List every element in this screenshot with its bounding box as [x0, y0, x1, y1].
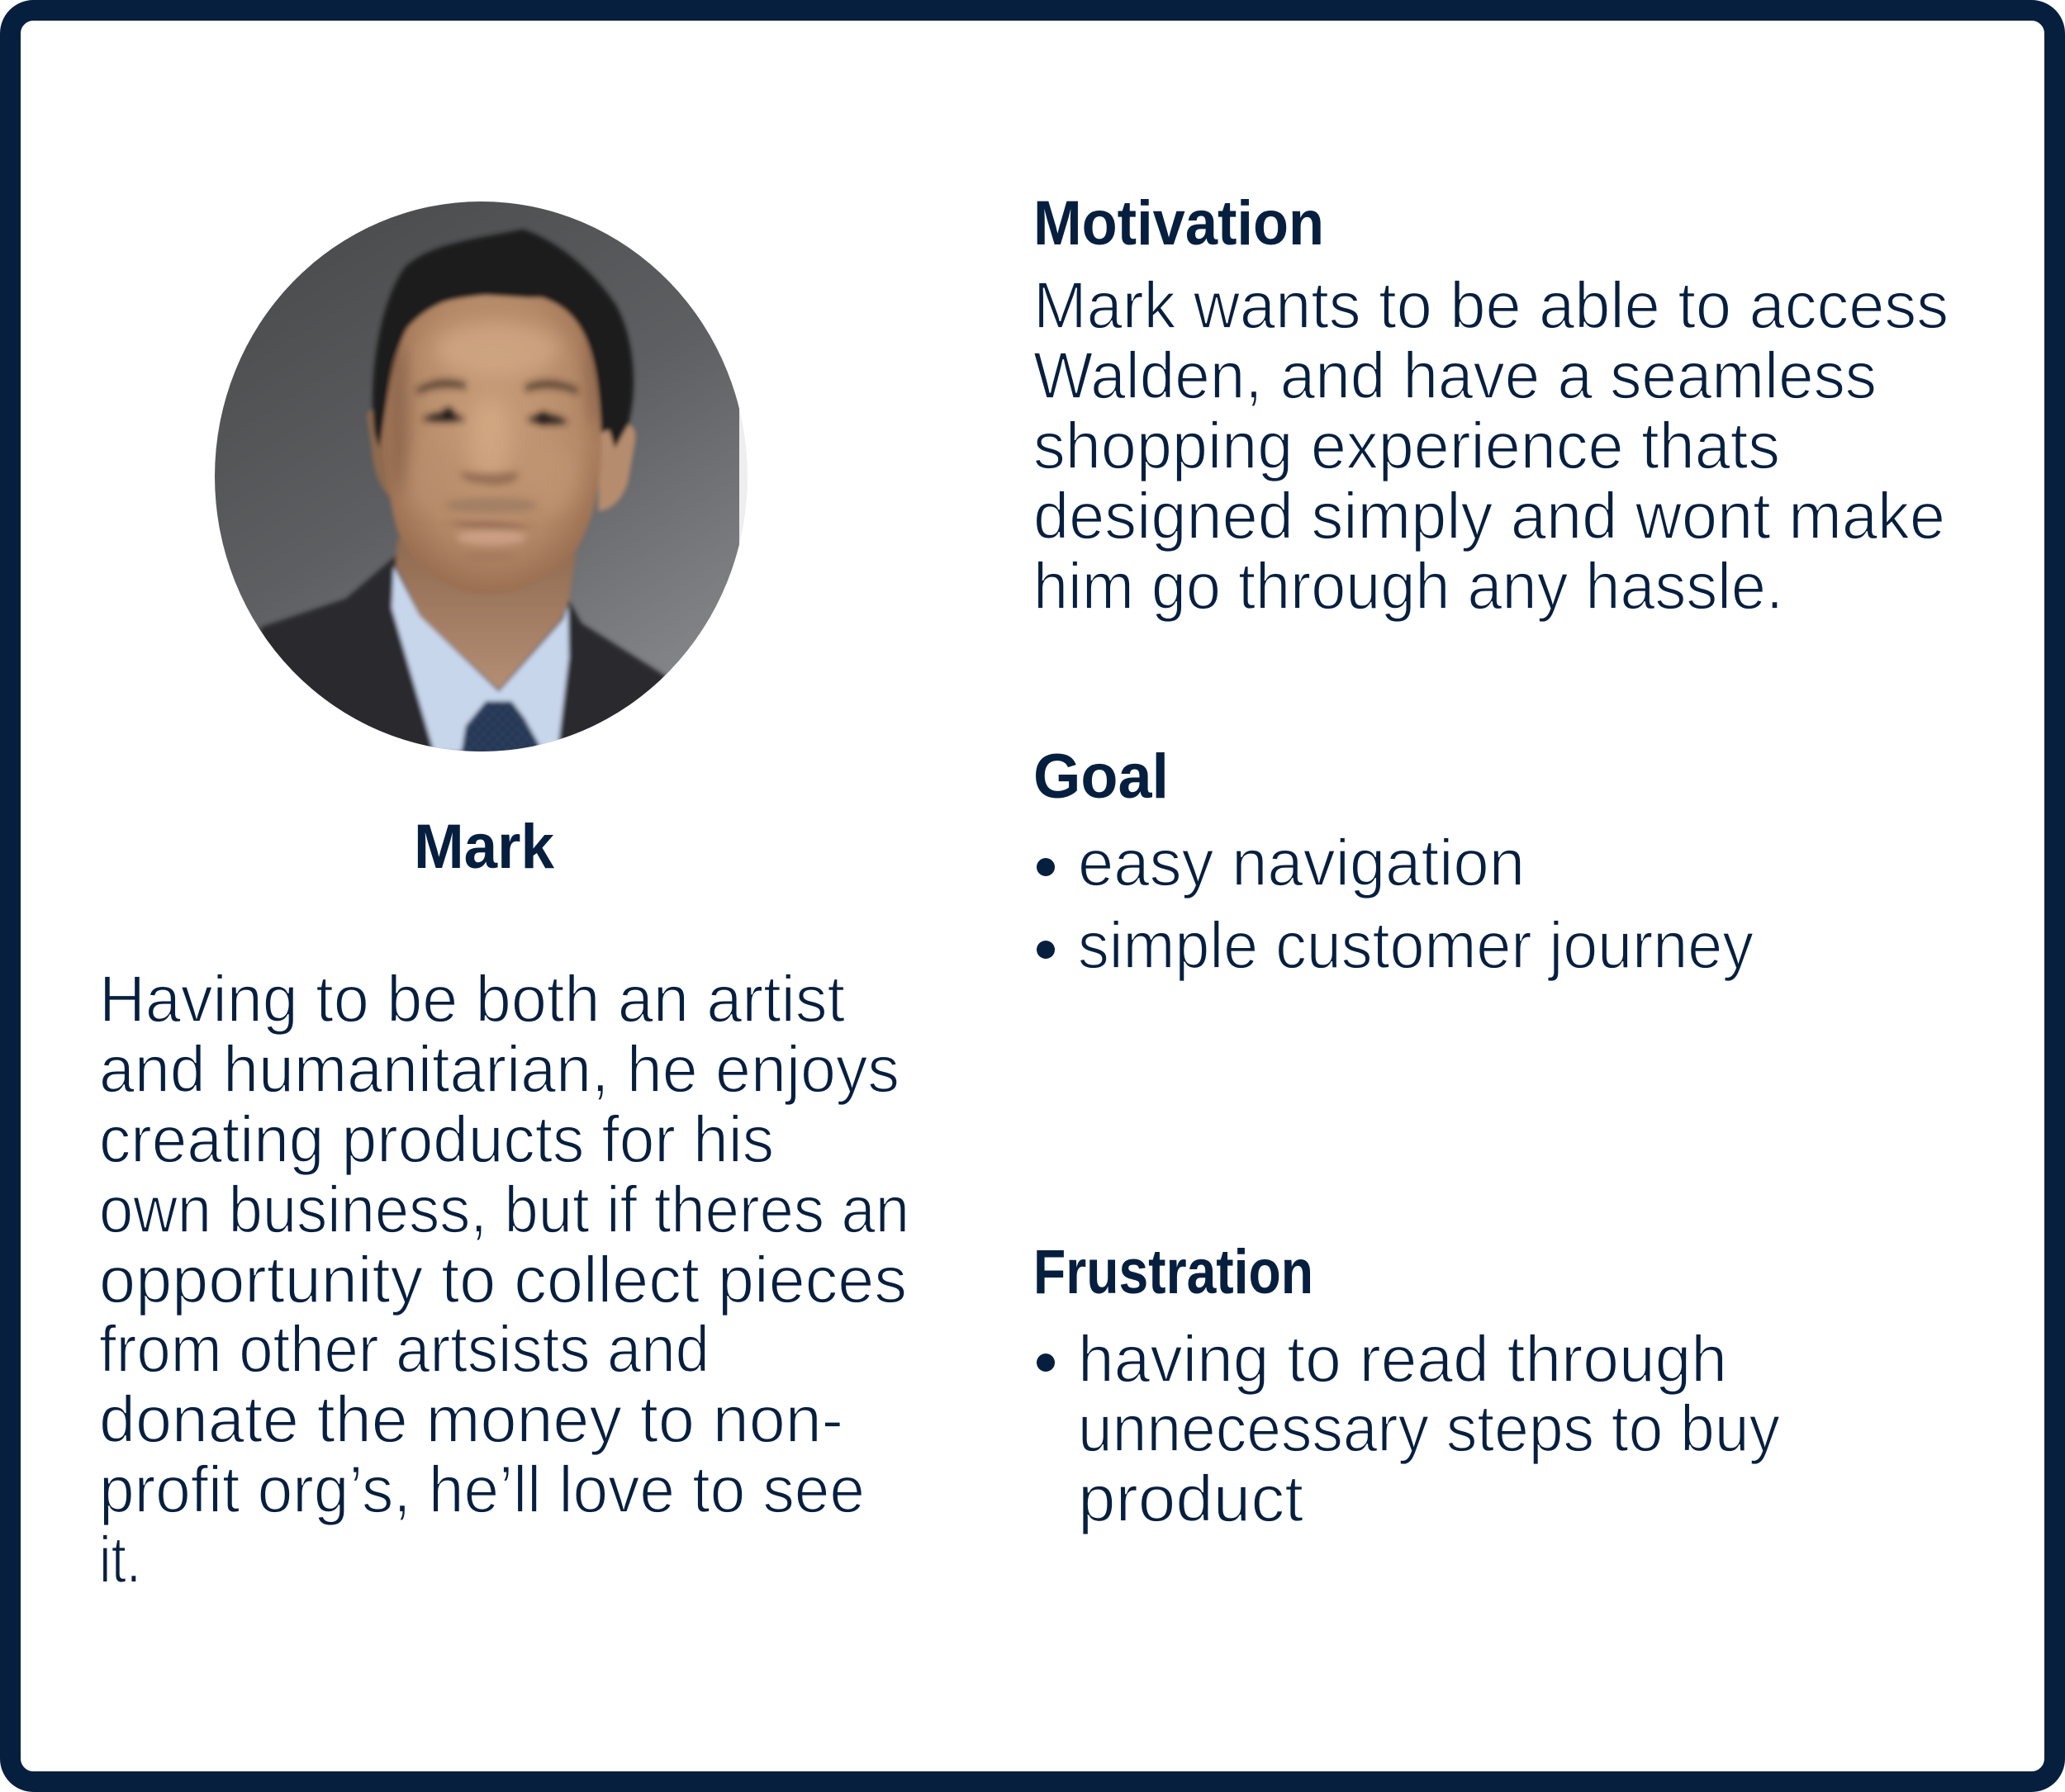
bio paragraph: and humanitarian, he enjoys — [99, 1032, 900, 1106]
motivation text — [1033, 268, 1949, 623]
motivation text: shopping experience thats — [1033, 409, 1780, 482]
frustration list: unnecessary steps to buy — [1078, 1391, 1780, 1465]
bio paragraph: Having to be both an artist — [99, 962, 845, 1036]
heading: Motivation: Motivation — [1033, 188, 1324, 258]
portrait photo — [215, 201, 748, 751]
goal list — [1037, 826, 1754, 982]
heading: Frustration: Frustration — [1033, 1237, 1313, 1307]
goal list: simple customer journey — [1078, 908, 1754, 982]
motivation text: Walden, and have a seamless — [1033, 339, 1877, 412]
motivation text: him go through any hassle. — [1033, 549, 1783, 623]
bio paragraph: donate the money to non- — [99, 1382, 843, 1456]
bio paragraph: from other artsists and — [99, 1312, 710, 1386]
bio paragraph: creating products for his — [99, 1102, 774, 1176]
frustration list — [1037, 1322, 1780, 1535]
motivation text: Mark wants to be able to access — [1033, 268, 1949, 342]
frustration list: product — [1078, 1462, 1303, 1535]
frustration list: having to read through — [1078, 1322, 1727, 1396]
bio paragraph: profit org’s, he’ll love to see — [99, 1453, 865, 1526]
name: Mark: Mark — [414, 812, 555, 882]
motivation text: designed simply and wont make — [1033, 479, 1945, 552]
bio paragraph: it. — [99, 1523, 141, 1596]
bio paragraph: opportunity to collect pieces — [99, 1243, 907, 1316]
bio paragraph: own business, but if theres an — [99, 1173, 909, 1246]
goal list: easy navigation — [1078, 826, 1525, 899]
bio paragraph — [99, 962, 909, 1596]
heading: Goal: Goal — [1033, 742, 1169, 812]
